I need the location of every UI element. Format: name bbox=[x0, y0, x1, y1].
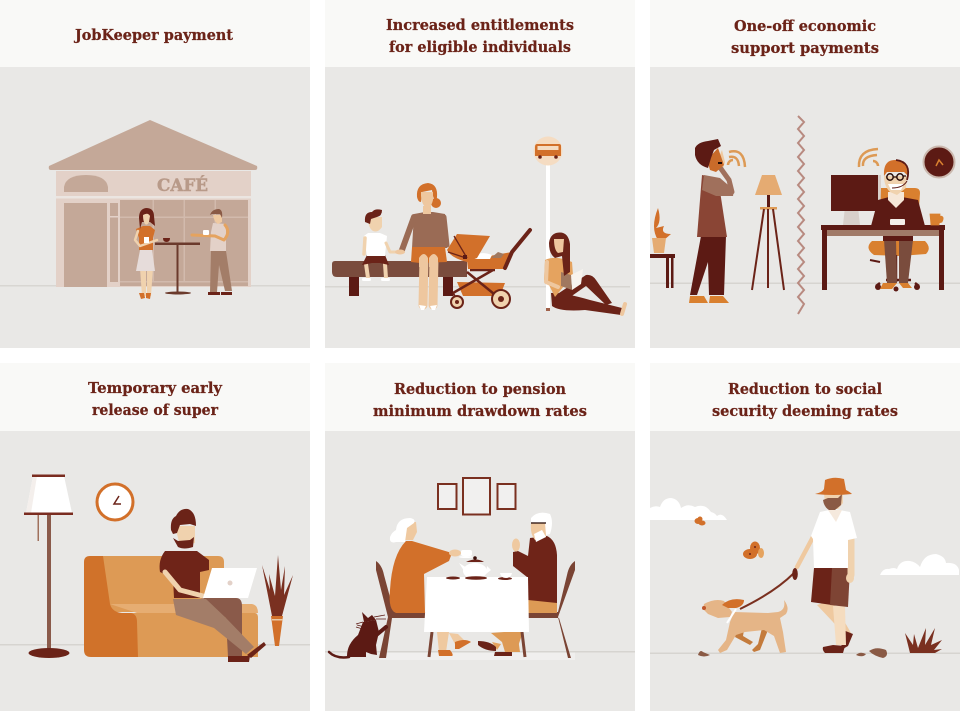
heading: for eligible individuals bbox=[389, 38, 571, 56]
illustration: computer monitor bbox=[831, 175, 881, 225]
panel: Reduction to pension minimum drawdown rates bbox=[325, 363, 635, 711]
illustration: child bbox=[362, 209, 400, 281]
icon: butterfly small bbox=[694, 516, 706, 526]
sign: CAFÉ: CAFÉ bbox=[157, 175, 208, 196]
panel: JobKeeper payment bbox=[0, 0, 310, 348]
illustration: office worker at desk bbox=[868, 160, 929, 292]
illustration: floor lamp bbox=[24, 474, 73, 658]
heading: Reduction to pension bbox=[394, 380, 566, 398]
illustration: leash bbox=[740, 568, 798, 609]
illustration: office desk bbox=[821, 225, 945, 290]
icon: signal waves, headset bbox=[859, 149, 878, 167]
illustration: woman with cup bbox=[135, 208, 157, 299]
heading bbox=[731, 17, 879, 57]
heading bbox=[373, 380, 587, 420]
illustration: man on phone bbox=[689, 139, 734, 303]
panel: Temporary early release of super bbox=[0, 363, 310, 711]
heading: release of super bbox=[92, 401, 219, 419]
divider: zigzag wall bbox=[798, 116, 804, 314]
laptop bbox=[203, 568, 257, 598]
illustration: potted plant bbox=[262, 555, 293, 646]
icon: wall clock bbox=[924, 146, 954, 178]
heading: support payments bbox=[731, 39, 879, 57]
illustration: walking man bbox=[797, 478, 857, 653]
illustration: side table and plant bbox=[650, 208, 675, 288]
heading: Reduction to social bbox=[728, 380, 882, 398]
illustration: tea table bbox=[424, 556, 529, 657]
illustration: sofa bbox=[84, 556, 258, 657]
illustration: woman at table bbox=[390, 518, 473, 656]
illustration: stroller bbox=[447, 230, 530, 308]
heading: One-off economic bbox=[734, 17, 876, 35]
illustration: man with laptop bbox=[160, 509, 266, 662]
panel: Reduction to social security deeming rates bbox=[650, 363, 960, 711]
illustration: woman reading bbox=[544, 232, 625, 315]
heading bbox=[88, 379, 223, 419]
illustration: mother bbox=[395, 183, 447, 310]
heading bbox=[386, 16, 574, 56]
teapot bbox=[459, 556, 491, 580]
panel: One-off economic support payments bbox=[650, 0, 960, 348]
icon: cloud left bbox=[650, 498, 727, 520]
heading: security deeming rates bbox=[712, 402, 898, 420]
illustration: cat bbox=[329, 612, 386, 657]
stroller wheels bbox=[451, 290, 510, 308]
illustration: grass tuft bbox=[905, 628, 942, 653]
heading: minimum drawdown rates bbox=[373, 402, 587, 420]
icon: butterfly large bbox=[743, 542, 764, 559]
illustration: chairs bbox=[376, 561, 575, 658]
heading: JobKeeper payment bbox=[73, 26, 233, 44]
heading: Temporary early bbox=[88, 379, 223, 397]
illustration: tripod lamp bbox=[752, 175, 784, 290]
heading: Increased entitlements bbox=[386, 16, 574, 34]
icon: cloud right bbox=[880, 554, 959, 575]
panel: Increased entitlements for eligible individuals bbox=[325, 0, 635, 348]
icon: signal waves, phone bbox=[728, 151, 745, 167]
illustration: picture frames bbox=[438, 478, 516, 514]
illustration: man with cup bbox=[192, 209, 232, 295]
illustration: café building bbox=[49, 120, 257, 287]
illustration: man at table bbox=[478, 513, 557, 656]
illustration: ground stones bbox=[698, 648, 887, 658]
illustration: bus stop sign bbox=[534, 136, 562, 311]
heading bbox=[712, 380, 898, 420]
icon: mug bbox=[930, 214, 943, 225]
illustration: dog bbox=[702, 599, 788, 653]
icon: wall clock bbox=[97, 484, 133, 520]
illustration: bench bbox=[332, 261, 467, 296]
illustration: café table bbox=[155, 238, 200, 294]
